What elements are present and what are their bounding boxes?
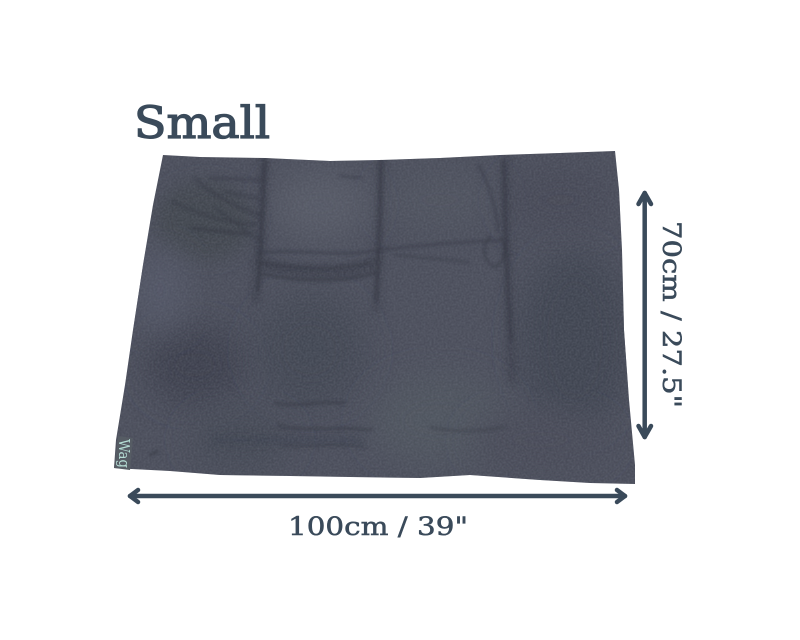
arrow: height xyxy=(638,193,651,437)
height label: 70cm / 27.5" xyxy=(657,221,686,408)
wide soft fold shadows xyxy=(253,158,514,379)
tonal shading xyxy=(132,165,630,470)
arrow: width xyxy=(130,490,625,502)
title: Small xyxy=(134,98,270,149)
infographic canvas xyxy=(114,104,682,538)
creases xyxy=(150,160,511,455)
photo of grey towel xyxy=(100,145,645,490)
width label: 100cm / 39" xyxy=(288,512,468,541)
fabric texture xyxy=(100,145,645,490)
towel label: Wag xyxy=(115,439,133,468)
